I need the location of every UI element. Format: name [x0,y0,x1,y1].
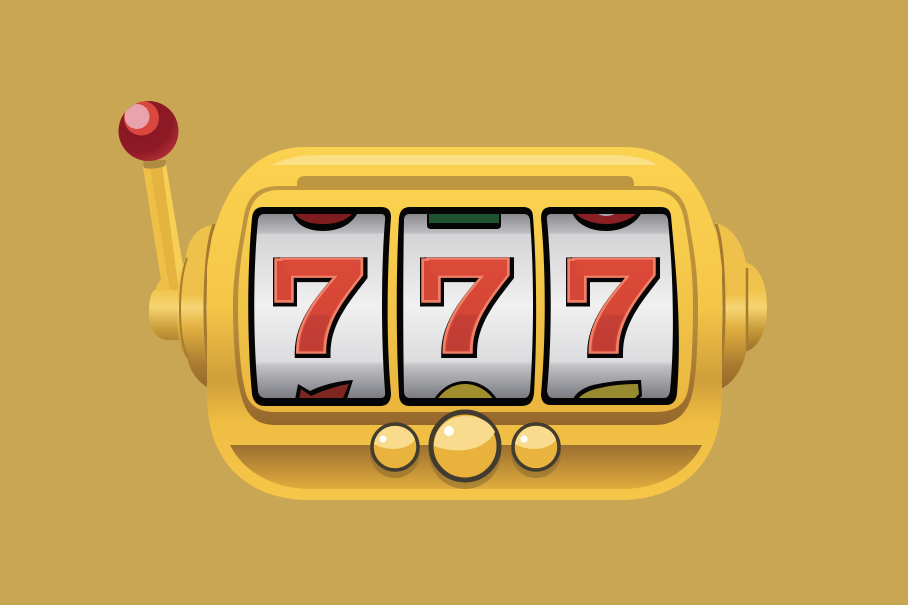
top vent [297,176,634,188]
reel 2 frame [397,207,536,406]
body shell [207,147,722,500]
bezel groove [233,186,698,425]
reel 3 top symbol [572,214,641,231]
reel 2 seven: 7 [422,231,514,379]
slot machine illustration [118,101,767,500]
lever arm [118,100,183,292]
button: right [511,424,561,478]
reel 1 frame [248,207,391,406]
reel 1 bottom symbol [295,380,353,398]
body side shadows [205,224,724,390]
reel 2 seven: 7 [422,231,514,379]
bezel panel [238,190,693,412]
reel 3 seven: 7 [570,233,661,381]
reel 2 top symbol [427,214,501,229]
lever ball [118,100,178,161]
reel 3 frame [541,207,679,405]
reel 1 seven: 7 [277,233,369,381]
left drum groove [180,258,188,358]
right outer knob [745,262,767,352]
lever shaft [143,164,183,292]
top highlight [272,155,657,165]
reel 2 [395,205,540,406]
tray under reels [230,445,702,489]
reel 3 seven: 7 [568,231,660,379]
reel 1 seven: 7 [276,231,367,379]
reel 2 seven: 7 [424,233,515,381]
right drum groove [746,268,748,350]
button: left [370,424,420,478]
reel 3 bottom symbol [574,380,642,398]
reel 2 bottom symbol [434,381,496,398]
reel 1 [245,205,395,406]
lever collar [143,160,166,169]
left drum [177,225,213,390]
mount cap [149,290,182,340]
reel 1 seven: 7 [276,231,367,379]
button: center [429,412,501,489]
lever mount [155,272,190,300]
reel 3 [540,205,680,405]
right drum [715,223,747,390]
reel 1 top symbol [292,214,357,231]
reel 3 seven: 7 [568,231,660,379]
machine body [207,147,722,500]
